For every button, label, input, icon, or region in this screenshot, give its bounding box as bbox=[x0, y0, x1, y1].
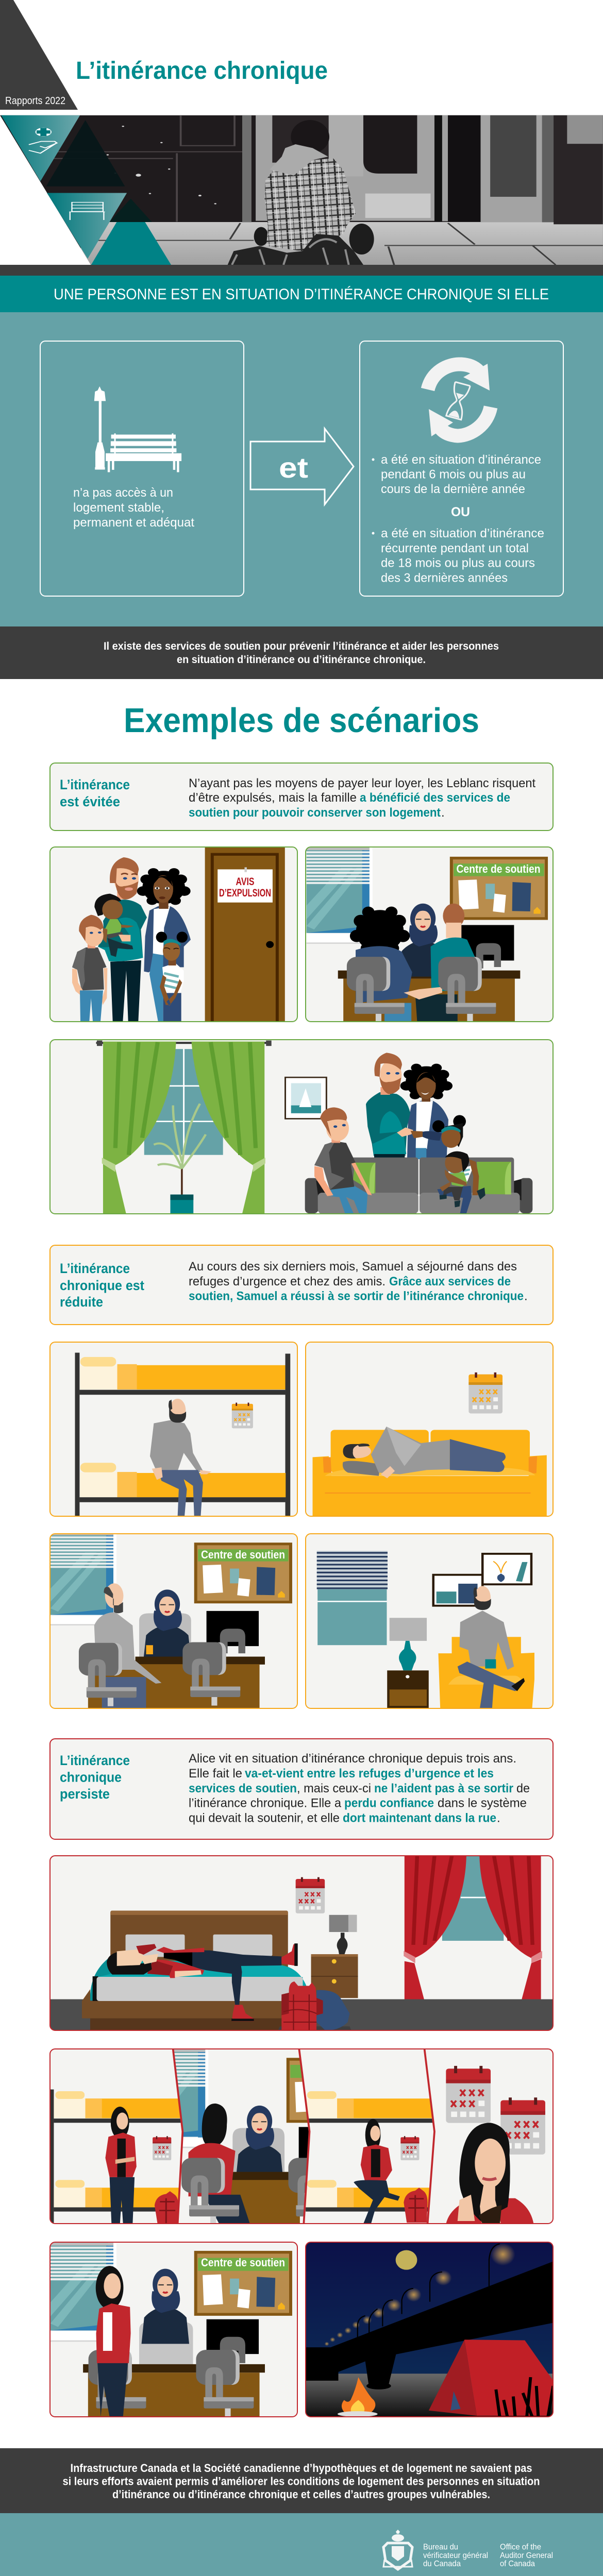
panel: Samuel on couch bbox=[306, 1342, 553, 1517]
scenario 2 text: Grâce aux services de bbox=[389, 1275, 511, 1289]
scenario 3 text: Elle fait le bbox=[189, 1767, 242, 1781]
English office name: Office of the bbox=[500, 2543, 541, 2551]
nightstand bbox=[311, 1954, 358, 1998]
moment: shelter meeting bbox=[142, 2049, 384, 2226]
scenario 2 label: réduite bbox=[60, 1294, 103, 1310]
eviction notice text: AVIS bbox=[236, 876, 255, 888]
bunk bed bbox=[75, 1353, 290, 1518]
closing note: si leurs efforts avaient permis d’améliorer les conditions de logement des personnes en situation bbox=[63, 2475, 540, 2487]
support centre sign: Centre de soutien bbox=[457, 862, 540, 875]
scenario 3 text: , mais ceux-ci bbox=[297, 1782, 371, 1795]
scenario 3 text: ne l’aident pas à se sortir bbox=[374, 1782, 513, 1795]
scenario 2 text: soutien, Samuel a réussi à se sortir de l’itinérance chronique bbox=[189, 1289, 524, 1303]
scenario 3 text: dans le système bbox=[438, 1796, 527, 1810]
dark bar under photo bbox=[0, 265, 603, 276]
tent bbox=[429, 2340, 553, 2416]
person seated with backpack bbox=[228, 115, 374, 265]
window bbox=[317, 1551, 388, 1645]
moon bbox=[396, 2250, 417, 2270]
bridge bbox=[306, 2243, 553, 2389]
panel: Samuel on bunk bed bbox=[50, 1342, 297, 1518]
window and curtains bbox=[96, 1041, 272, 1214]
door bbox=[205, 847, 285, 1022]
eviction notice text: D’EXPULSION bbox=[219, 887, 271, 899]
panel: Samuel at home bbox=[306, 1534, 553, 1708]
right criterion text: de 18 mois ou plus au cours bbox=[381, 556, 535, 570]
definition panel bbox=[0, 312, 603, 626]
footer band bbox=[0, 2513, 603, 2576]
scenario 3 text: qui devait la soutenir, et elle bbox=[189, 1811, 340, 1825]
panel: family at support centre bbox=[306, 847, 553, 1023]
bed with Alice bbox=[82, 1910, 351, 2031]
definition heading band bbox=[0, 276, 603, 312]
left criterion box bbox=[40, 341, 244, 596]
scenario 1 text bbox=[189, 776, 535, 820]
panel: Alice strip of four moments bbox=[50, 2049, 553, 2226]
support services note bbox=[0, 626, 603, 679]
right criterion text: OU bbox=[451, 505, 470, 519]
scenario 3 text: . bbox=[497, 1811, 500, 1825]
scenario 1 label: L’itinérance bbox=[60, 777, 130, 792]
photo triangles overlay bbox=[0, 115, 171, 265]
boy bbox=[314, 1107, 372, 1213]
icon: cycle with hourglass bbox=[428, 364, 491, 436]
sofa bbox=[305, 1158, 532, 1214]
scenario 2 intro box bbox=[50, 1245, 553, 1325]
scenario 3 text: Alice vit en situation d’itinérance chronique depuis trois ans. bbox=[189, 1752, 516, 1766]
dividers bbox=[173, 2049, 434, 2224]
scenario 1 text: soutien pour pouvoir conserver son logement bbox=[189, 806, 441, 820]
scenario 3 text: perdu confiance bbox=[344, 1796, 434, 1810]
scenario 3 text: de bbox=[516, 1782, 530, 1795]
campfire bbox=[338, 2377, 378, 2417]
moment: stress close-up bbox=[446, 2066, 545, 2224]
scenario 1 intro box bbox=[50, 763, 553, 831]
calendar bbox=[468, 1372, 502, 1414]
closing note bbox=[0, 2448, 603, 2513]
triangle with bench icon bbox=[47, 193, 127, 259]
scenario 1 text: d’être expulsés, mais la famille bbox=[189, 791, 357, 805]
right criterion text: récurrente pendant un total bbox=[381, 541, 529, 555]
left criterion text bbox=[73, 486, 194, 530]
armchair and Samuel bbox=[438, 1586, 534, 1708]
panel: family at home bbox=[50, 1040, 553, 1214]
scenario 2 text: refuges d’urgence et chez des amis. bbox=[189, 1275, 386, 1289]
scenario 1 text: N’ayant pas les moyens de payer leur loyer, les Leblanc risquent bbox=[189, 776, 535, 790]
support centre sign: Centre de soutien bbox=[201, 1548, 285, 1561]
right criterion box bbox=[360, 341, 563, 596]
closing note: Infrastructure Canada et la Société canadienne d’hypothèques et de logement ne savaient pas bbox=[70, 2462, 532, 2475]
French office name: du Canada bbox=[423, 2560, 461, 2568]
right criterion text: a été en situation d’itinérance bbox=[381, 453, 541, 467]
scenario 2 text bbox=[189, 1260, 528, 1303]
scenario 3 label: chronique bbox=[60, 1769, 122, 1785]
red curtains bbox=[404, 1856, 542, 1999]
eviction notice text bbox=[219, 876, 271, 899]
French office name: Bureau du bbox=[423, 2543, 458, 2551]
scenario 3 text: va-et-vient entre les refuges d’urgence et les bbox=[245, 1767, 494, 1781]
panel: Alice leaves support centre bbox=[50, 2242, 297, 2417]
right criterion text: cours de la dernière année bbox=[381, 482, 525, 496]
scenario 1 text: a bénéficié des services de bbox=[360, 791, 510, 805]
right criterion text bbox=[372, 453, 544, 585]
definition heading band: UNE PERSONNE EST EN SITUATION D’ITINÉRANCE CHRONIQUE SI ELLE bbox=[54, 286, 549, 303]
arrow: et bbox=[250, 429, 354, 504]
scenario 2 text: Au cours des six derniers mois, Samuel a séjourné dans des bbox=[189, 1260, 517, 1274]
backpacks bbox=[278, 1981, 351, 2031]
triangle with care icon bbox=[1, 115, 80, 181]
calendar bbox=[232, 1402, 253, 1428]
moment: shelter sitting bbox=[306, 2091, 437, 2224]
right criterion text: des 3 dernières années bbox=[381, 571, 508, 585]
scenario 3 text: dort maintenant dans la rue bbox=[343, 1811, 496, 1825]
French office name: vérificateur général bbox=[423, 2551, 488, 2560]
panel: Samuel at support centre bbox=[50, 1533, 297, 1708]
lamp and nightstand bbox=[387, 1618, 429, 1708]
scenario 1 label: est évitée bbox=[60, 794, 120, 809]
scenario 2 label: chronique est bbox=[60, 1278, 144, 1293]
English office name: of Canada bbox=[500, 2560, 535, 2568]
scenario 3 label: L’itinérance bbox=[60, 1753, 130, 1768]
parents bbox=[366, 1053, 453, 1159]
sofa bbox=[312, 1430, 547, 1517]
right criterion text: a été en situation d’itinérance bbox=[381, 527, 544, 540]
family bbox=[72, 857, 191, 1021]
scenario 1 label bbox=[60, 777, 130, 809]
report year: Rapports 2022 bbox=[5, 95, 65, 107]
calendar bbox=[296, 1877, 325, 1913]
arrow: et: et bbox=[279, 451, 308, 484]
support services note: Il existe des services de soutien pour prévenir l’itinérance et aider les personnes bbox=[104, 640, 499, 652]
scenario 3 text bbox=[189, 1752, 530, 1825]
picture frame bbox=[286, 1077, 326, 1118]
shelves bbox=[433, 1554, 531, 1606]
panel: night under the bridge bbox=[306, 2242, 554, 2417]
left criterion text: n’a pas accès à un bbox=[73, 486, 173, 500]
icon: lamp and bench bbox=[94, 386, 181, 472]
scenario 3 label: persiste bbox=[60, 1786, 110, 1802]
scenario 2 text: . bbox=[524, 1289, 528, 1303]
girl and toddler bbox=[432, 1115, 485, 1213]
scenario 3 label bbox=[60, 1753, 130, 1802]
lamp bbox=[329, 1915, 357, 1955]
panel: family with eviction notice bbox=[50, 847, 297, 1022]
icon: coat of arms bbox=[383, 2530, 412, 2569]
scenario 2 label: L’itinérance bbox=[60, 1261, 130, 1276]
support centre sign: Centre de soutien bbox=[201, 2256, 285, 2269]
left criterion text: logement stable, bbox=[73, 501, 164, 515]
scenario 3 text: services de soutien bbox=[189, 1782, 297, 1795]
section heading: Exemples de scénarios bbox=[124, 701, 479, 740]
Alice lying bbox=[107, 1943, 298, 2021]
English office name bbox=[500, 2543, 553, 2568]
hero photo bbox=[0, 115, 603, 265]
scenario 3 text: l’itinérance chronique. Elle a bbox=[189, 1796, 342, 1810]
plant bbox=[154, 1104, 206, 1214]
bed bbox=[82, 1910, 306, 2031]
scenario 2 label bbox=[60, 1261, 144, 1310]
reeds bbox=[496, 2377, 553, 2417]
French office name bbox=[423, 2543, 488, 2568]
panel: Alice on bed bbox=[50, 1856, 554, 2031]
support services note: en situation d’itinérance ou d’itinérance chronique. bbox=[177, 654, 426, 666]
scenario 3 intro box bbox=[50, 1739, 553, 1839]
Samuel lying bbox=[343, 1427, 506, 1478]
moment: shelter standing bbox=[50, 2090, 185, 2225]
English office name: Auditor General bbox=[500, 2551, 553, 2560]
Samuel bbox=[150, 1399, 211, 1516]
closing note: d’itinérance ou d’itinérance chronique et celles d’autres groupes vulnérables. bbox=[112, 2488, 490, 2501]
family on sofa bbox=[305, 1053, 532, 1214]
scenario 1 text: . bbox=[441, 806, 445, 820]
header triangle bbox=[0, 0, 78, 110]
left criterion text: permanent et adéquat bbox=[73, 516, 194, 530]
right criterion text: pendant 6 mois ou plus au bbox=[381, 468, 526, 481]
title: L’itinérance chronique bbox=[76, 57, 328, 84]
